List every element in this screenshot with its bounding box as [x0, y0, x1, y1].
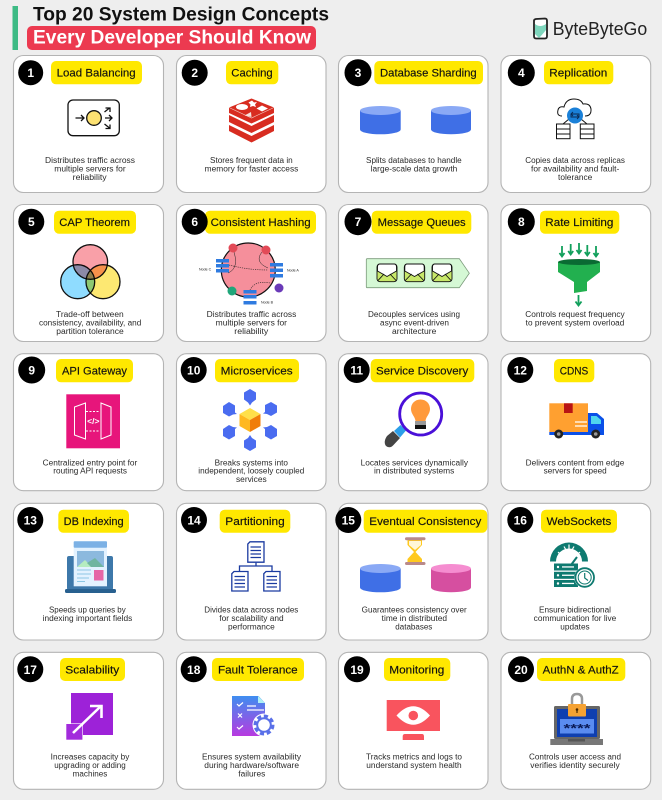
description: Tracks metrics and logs to [366, 753, 463, 762]
description: Controls request frequency [525, 310, 625, 319]
description: indexing important fields [43, 614, 132, 623]
badge 8: 8 [518, 215, 525, 229]
heading [554, 359, 594, 382]
description: independent, loosely coupled [198, 467, 304, 476]
icon: magnifier with bulb [385, 393, 442, 447]
description: Splits databases to handle [366, 156, 462, 165]
badge 19 [344, 656, 370, 682]
heading: Eventual Consistency [369, 516, 482, 528]
heading [51, 61, 142, 84]
heading [60, 658, 125, 681]
icon: hash ring [199, 243, 299, 304]
icon: two database cylinders [360, 106, 471, 134]
logo: ByteByteGo: ByteByteGo [553, 18, 647, 39]
badge 4: 4 [518, 66, 525, 80]
icon: scale up arrow [66, 693, 113, 740]
badge 4 [508, 59, 535, 86]
icon: funnel with arrows [558, 243, 600, 306]
badge 7: 7 [355, 215, 362, 229]
heading: Monitoring [389, 664, 444, 676]
description: to prevent system overload [526, 318, 624, 327]
icon: cloud replication [556, 99, 594, 139]
description: time in distributed [382, 614, 447, 623]
description: for availability and fault- [531, 164, 620, 173]
description [204, 606, 298, 631]
heading [374, 61, 483, 84]
badge 20: 20 [514, 663, 528, 677]
description: Breaks systems into [215, 458, 289, 467]
description: reliability [234, 327, 268, 336]
badge 10: 10 [187, 364, 201, 378]
panel: 17 Scalability [14, 652, 164, 789]
icon: message queue [366, 259, 469, 288]
badge 13 [17, 507, 43, 533]
badge 6 [182, 209, 208, 235]
icon: laptop with padlock [550, 694, 603, 745]
description [529, 753, 621, 770]
heading [540, 211, 619, 234]
icon: hash ring: Node C [199, 268, 212, 272]
badge 9: 9 [28, 364, 35, 378]
badge 2 [182, 60, 208, 86]
description: tolerance [558, 173, 593, 182]
description: consistency, availability, and [39, 318, 141, 327]
badge 20 [508, 656, 534, 682]
heading: Partitioning [225, 516, 285, 528]
badge 10 [181, 357, 207, 383]
panel: 11 Service Discovery [338, 354, 488, 491]
description: for scalability and [219, 614, 284, 623]
badge 7 [344, 208, 372, 235]
badge 5 [18, 209, 44, 235]
panel: 13 DB Indexing [14, 503, 164, 640]
panel: 20 AuthN & AuthZ [501, 652, 651, 789]
badge 11 [344, 357, 370, 383]
header accent bar [12, 6, 18, 50]
badge 16 [507, 507, 533, 533]
icon: api gateway: </> [87, 416, 99, 426]
badge 12 [507, 357, 533, 383]
description: servers for speed [544, 467, 607, 476]
badge 3: 3 [355, 66, 362, 80]
description [202, 753, 301, 778]
icon: api gateway [66, 394, 120, 448]
description: memory for faster access [205, 164, 298, 173]
description [526, 458, 625, 476]
description: partition tolerance [56, 327, 124, 336]
heading [220, 510, 290, 533]
heading [56, 359, 133, 382]
heading [215, 359, 299, 382]
description [51, 753, 129, 778]
icon: hash ring: Node B [261, 300, 274, 304]
panel: 1 Load Balancing [14, 56, 164, 192]
badge 5: 5 [28, 215, 35, 229]
panel: 14 Partitioning [176, 503, 326, 640]
panel: 5 CAP Theorem [14, 204, 164, 342]
description: Increases capacity by [51, 753, 129, 762]
description [534, 606, 617, 631]
icon: monitor with eye [387, 700, 440, 740]
description [368, 310, 460, 336]
description: Divides data across nodes [204, 606, 298, 615]
badge 18 [181, 656, 207, 682]
heading [226, 61, 278, 84]
panel: 16 WebSockets [501, 503, 651, 640]
description [207, 310, 296, 336]
icon: load balancer [68, 100, 119, 136]
badge 17: 17 [24, 663, 37, 677]
description: Delivers content from edge [526, 458, 625, 467]
heading [364, 510, 487, 533]
badge 6: 6 [191, 215, 198, 229]
heading: AuthN & AuthZ [543, 664, 619, 676]
description: Trade-off between [56, 310, 124, 319]
badge 1 [18, 60, 43, 85]
description: databases [395, 622, 432, 631]
description [43, 458, 138, 476]
description: Distributes traffic across [207, 310, 296, 319]
badge 17 [17, 656, 43, 682]
description: in distributed systems [374, 467, 454, 476]
description [366, 156, 462, 173]
description: failures [238, 769, 265, 778]
description: Decouples services using [368, 310, 460, 319]
description: Controls user access and [529, 753, 621, 762]
description: updates [560, 622, 590, 631]
description: Speeds up queries by [49, 606, 126, 615]
icon: hash ring: Node A [287, 268, 299, 272]
badge 15 [335, 507, 361, 533]
badge 18: 18 [187, 663, 201, 677]
panel: 19 Monitoring [338, 652, 488, 789]
title: Every Developer Should Know [33, 28, 311, 48]
description [198, 458, 304, 484]
heading: Caching [231, 68, 273, 80]
heading [544, 61, 613, 84]
icon: document with gear [232, 696, 276, 736]
description: verifies identity securely [530, 761, 620, 770]
panel: 7 Message Queues [338, 204, 488, 342]
badge 13: 13 [24, 514, 37, 528]
panel: 10 Microservices [176, 354, 326, 491]
description [45, 156, 135, 182]
description: multiple servers for [54, 164, 126, 173]
badge 9 [18, 356, 45, 384]
icon: laptop with padlock: **** [564, 722, 591, 736]
badge 8 [508, 208, 535, 235]
heading: WebSockets [547, 516, 611, 528]
panel: 12 CDNS [501, 354, 651, 491]
description: performance [228, 622, 275, 631]
description [525, 156, 625, 182]
title [27, 4, 329, 50]
description: architecture [392, 327, 437, 336]
badge 15: 15 [342, 514, 355, 528]
description: Locates services dynamically [361, 458, 468, 467]
heading: Load Balancing [57, 68, 136, 80]
badge 1: 1 [27, 66, 34, 80]
heading: Rate Limiting [545, 217, 613, 229]
icon: microservices hub [223, 389, 277, 451]
badge 2: 2 [191, 66, 198, 80]
description: during hardware/software [204, 761, 300, 770]
description [43, 606, 132, 623]
panel: 18 Fault Tolerance [176, 652, 326, 789]
description [366, 753, 463, 770]
description [39, 310, 141, 336]
icon: document tree [232, 542, 280, 591]
description: Copies data across replicas [525, 156, 625, 165]
description: services [236, 475, 267, 484]
description: multiple servers for [216, 318, 287, 327]
description [205, 156, 298, 173]
heading: Replication [549, 68, 607, 80]
badge 3 [344, 59, 372, 86]
heading [212, 658, 304, 681]
description: Centralized entry point for [43, 458, 138, 467]
heading [54, 211, 136, 234]
description: Stores frequent data in [210, 156, 293, 165]
heading: Database Sharding [380, 68, 477, 80]
description: communication for live [534, 614, 617, 623]
heading: Microservices [221, 366, 293, 378]
icon: redis stack [229, 98, 274, 142]
title: Top 20 System Design Concepts [33, 4, 329, 26]
heading: Consistent Hashing [211, 217, 311, 229]
description: large-scale data growth [371, 164, 457, 173]
heading: Scalability [65, 664, 120, 676]
heading: Service Discovery [376, 366, 469, 378]
icon: hourglass and databases [360, 537, 471, 592]
heading [384, 658, 450, 681]
description: reliability [73, 173, 107, 182]
description: async event-driven [380, 318, 449, 327]
description [361, 458, 468, 476]
badge 12: 12 [514, 364, 527, 378]
description: machines [73, 769, 107, 778]
heading: Fault Tolerance [218, 664, 298, 676]
heading: API Gateway [62, 366, 128, 378]
panel: 6 Consistent Hashing [176, 204, 326, 342]
description [525, 310, 625, 327]
panel: 4 Replication [501, 56, 651, 192]
badge 14: 14 [187, 514, 201, 528]
icon: venn diagram [61, 245, 120, 299]
icon: delivery truck [549, 403, 604, 438]
description: Guarantees consistency over [362, 606, 467, 615]
heading [541, 510, 617, 533]
heading: DB Indexing [64, 516, 124, 528]
description [362, 606, 467, 631]
panel: 8 Rate Limiting [501, 204, 651, 342]
heading [371, 359, 474, 382]
icon: laptop with document [65, 541, 116, 593]
panel: 15 Eventual Consistency [335, 503, 488, 640]
description: Distributes traffic across [45, 156, 135, 165]
description: routing API requests [53, 467, 127, 476]
heading: Message Queues [378, 217, 466, 229]
icon: gauge server clock [550, 542, 595, 588]
badge 14 [181, 507, 207, 533]
heading [537, 658, 625, 681]
description: understand system health [366, 761, 462, 770]
panel: 3 Database Sharding [338, 56, 488, 192]
description: Ensures system availability [202, 753, 301, 762]
description: upgrading or adding [54, 761, 126, 770]
badge 16: 16 [514, 514, 527, 528]
heading: CAP Theorem [59, 217, 130, 229]
heading [58, 510, 129, 533]
panel: 2 Caching [176, 56, 326, 192]
badge 19: 19 [350, 663, 364, 677]
description: Ensure bidirectional [539, 606, 611, 615]
panel: 9 API Gateway [14, 354, 164, 491]
badge 11: 11 [350, 364, 363, 378]
heading: CDNS [560, 366, 588, 378]
heading [372, 211, 471, 234]
heading [205, 211, 316, 234]
